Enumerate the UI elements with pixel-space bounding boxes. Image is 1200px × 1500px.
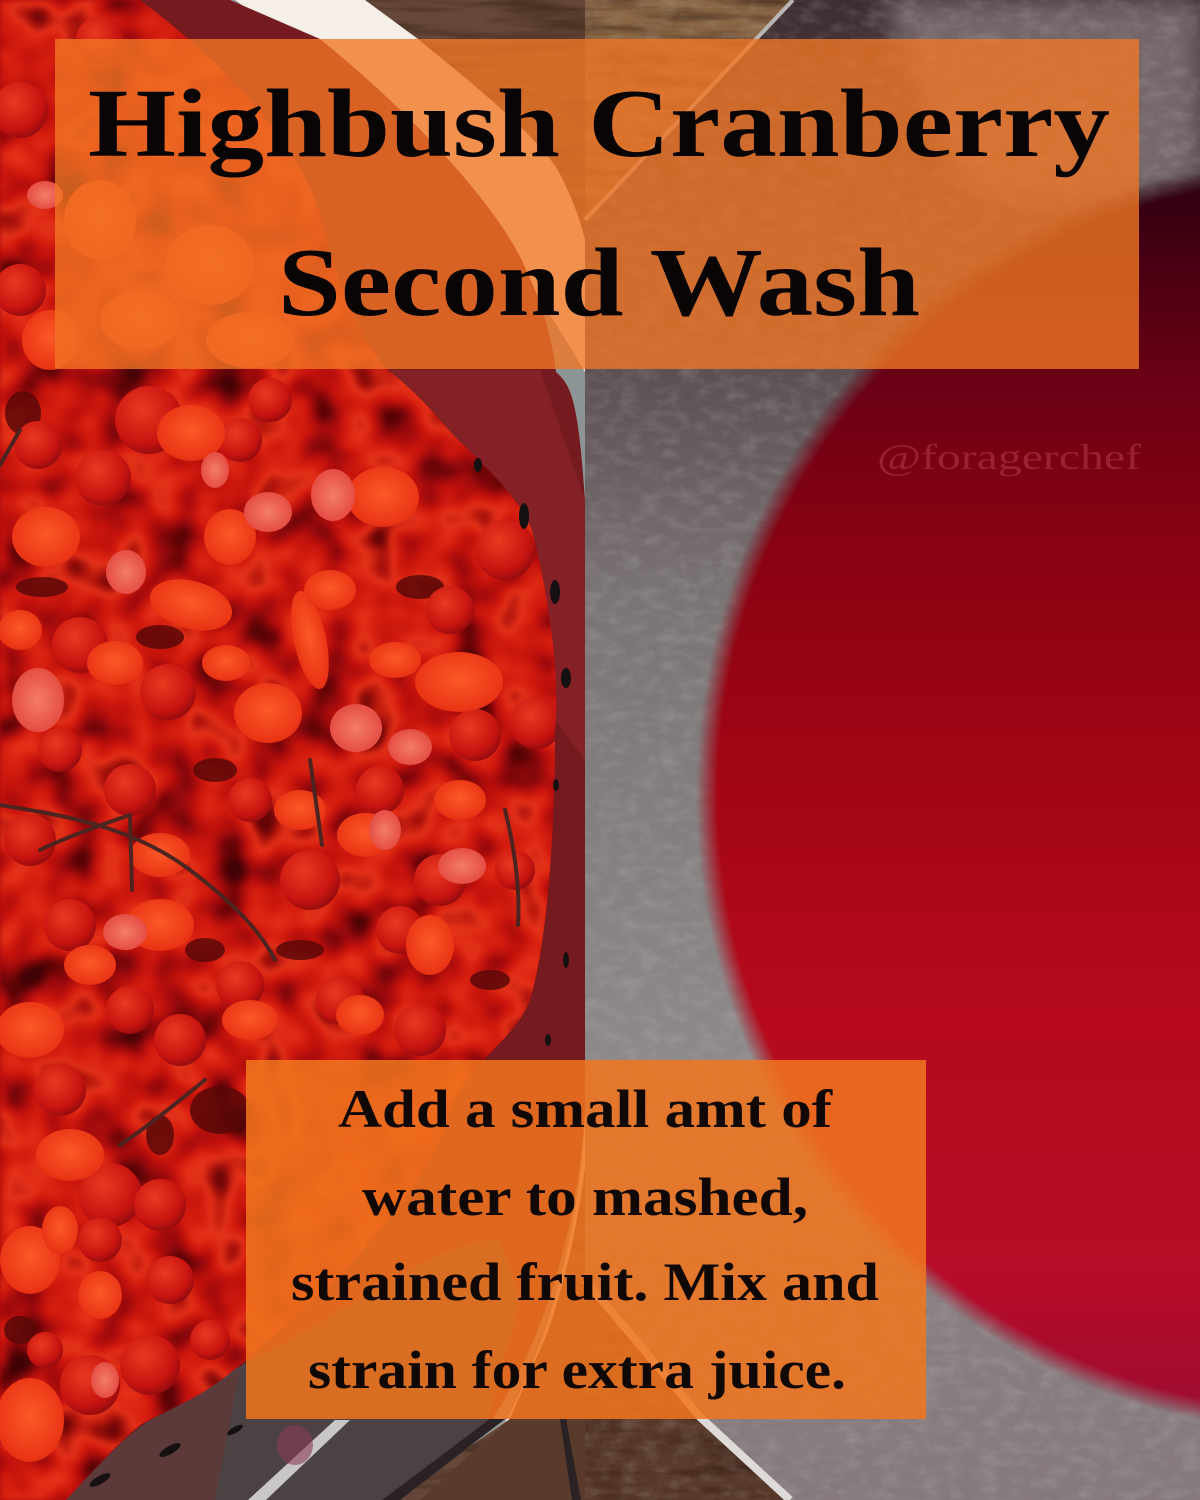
colander lower reddish metal xyxy=(66,1370,240,1500)
title panel xyxy=(55,39,1139,369)
bowl metal xyxy=(585,0,1200,1500)
title background xyxy=(55,39,1139,369)
dark gaps xyxy=(4,391,510,1344)
wood between colander and bowl xyxy=(420,1332,585,1500)
instruction background xyxy=(246,1060,926,1419)
instruction line 2: water to mashed, xyxy=(362,1167,808,1227)
bowl lower rim line xyxy=(585,1280,790,1500)
instruction line 3: strained fruit. Mix and xyxy=(291,1252,879,1312)
colander steel highlight xyxy=(248,1420,350,1500)
colander dark edge xyxy=(382,1419,505,1500)
photo panel: steel bowl with red juice xyxy=(585,0,1200,1500)
pink seeds xyxy=(12,181,486,1398)
red berries xyxy=(0,16,562,1415)
photo panel: colander with mashed berries xyxy=(0,0,600,1500)
bowl top light area xyxy=(880,0,1200,203)
dark seam strip xyxy=(560,1419,581,1500)
watermark: @foragerchef xyxy=(877,437,1141,477)
berry mass xyxy=(0,0,600,1500)
berry mass texture xyxy=(0,0,600,1500)
colander outer steel edge xyxy=(230,0,585,1450)
brushed metal texture xyxy=(585,0,1200,1500)
title line 1: Highbush Cranberry xyxy=(88,70,1110,178)
orange petals xyxy=(0,180,503,1462)
berry stems xyxy=(0,430,518,1145)
instruction panel xyxy=(246,1060,926,1419)
colander interior metal xyxy=(88,0,585,1476)
instruction line 4: strain for extra juice. xyxy=(308,1340,846,1400)
berry mass base colour xyxy=(0,0,600,1500)
colander lower steel xyxy=(66,1363,488,1500)
instruction line 1: Add a small amt of xyxy=(338,1079,833,1139)
red juice xyxy=(680,150,1200,1440)
bowl upper rim line xyxy=(585,0,793,220)
colander rim xyxy=(235,0,585,1446)
colander interior shading xyxy=(390,370,585,760)
title line 2: Second Wash xyxy=(278,229,920,337)
colander holes xyxy=(88,458,571,1489)
berry stain xyxy=(277,1425,313,1465)
